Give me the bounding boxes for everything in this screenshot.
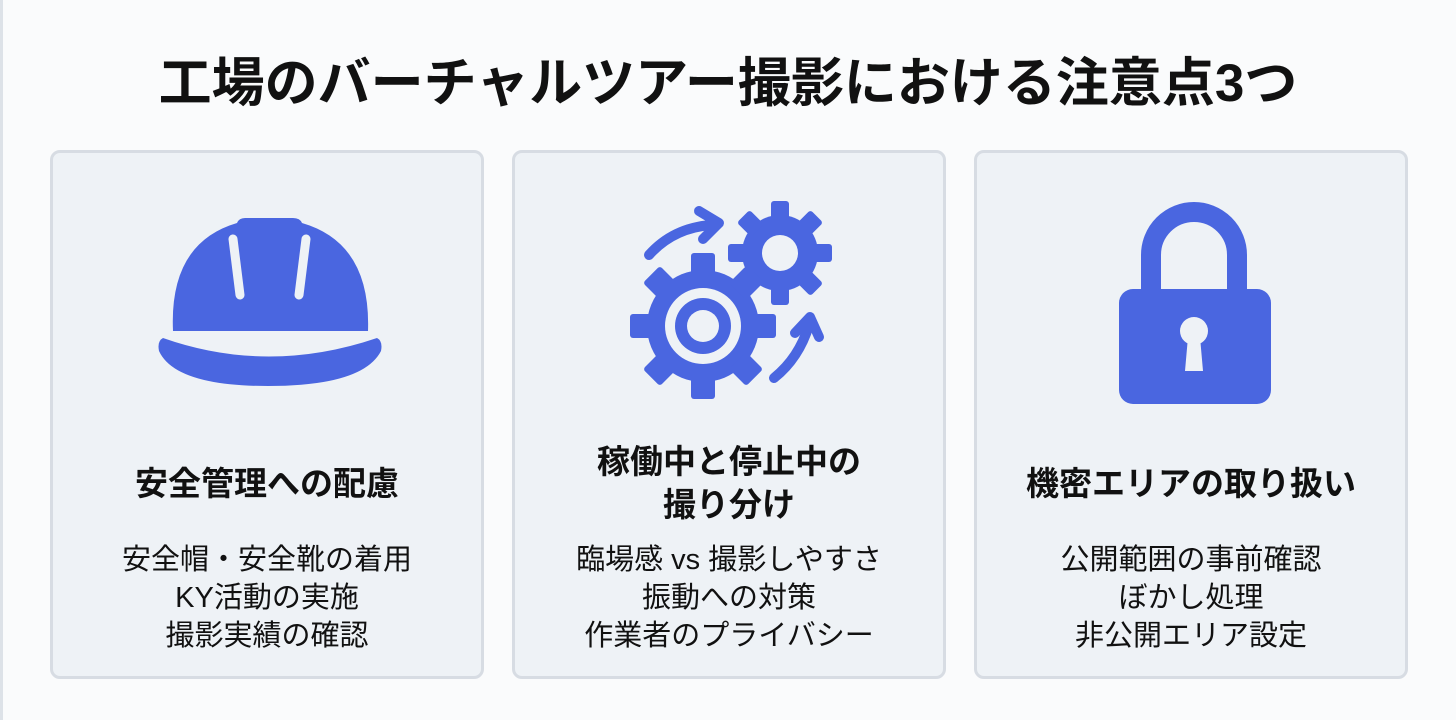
panel: operation xyxy=(512,150,946,679)
text block xyxy=(122,544,412,652)
title: 工場のバーチャルツアー撮影における注意点3つ xyxy=(159,54,1297,113)
panel: safety xyxy=(50,150,484,679)
icon: padlock xyxy=(1119,202,1271,404)
heading: 機密エリアの取り扱い xyxy=(1026,465,1356,502)
text block xyxy=(576,544,882,652)
text block: 作業者のプライバシー xyxy=(584,620,874,652)
text block: 安全帽・安全靴の着用 xyxy=(122,544,412,576)
text block: ぼかし処理 xyxy=(1118,582,1264,614)
panel: confidential xyxy=(974,150,1408,679)
text block: 振動への対策 xyxy=(642,582,816,614)
heading: 稼働中と停止中の xyxy=(597,443,861,480)
text block: 臨場感 vs 撮影しやすさ xyxy=(576,544,882,576)
text block: 公開範囲の事前確認 xyxy=(1060,544,1322,576)
heading: 安全管理への配慮 xyxy=(135,465,399,502)
icon: hard hat xyxy=(158,218,382,386)
text block: KY活動の実施 xyxy=(175,582,359,614)
heading xyxy=(597,443,861,523)
text block: 非公開エリア設定 xyxy=(1075,620,1307,652)
text block xyxy=(1060,544,1322,652)
heading: 撮り分け xyxy=(663,486,795,523)
icon: gears and arrows xyxy=(630,201,832,399)
text block: 撮影実績の確認 xyxy=(165,620,368,652)
